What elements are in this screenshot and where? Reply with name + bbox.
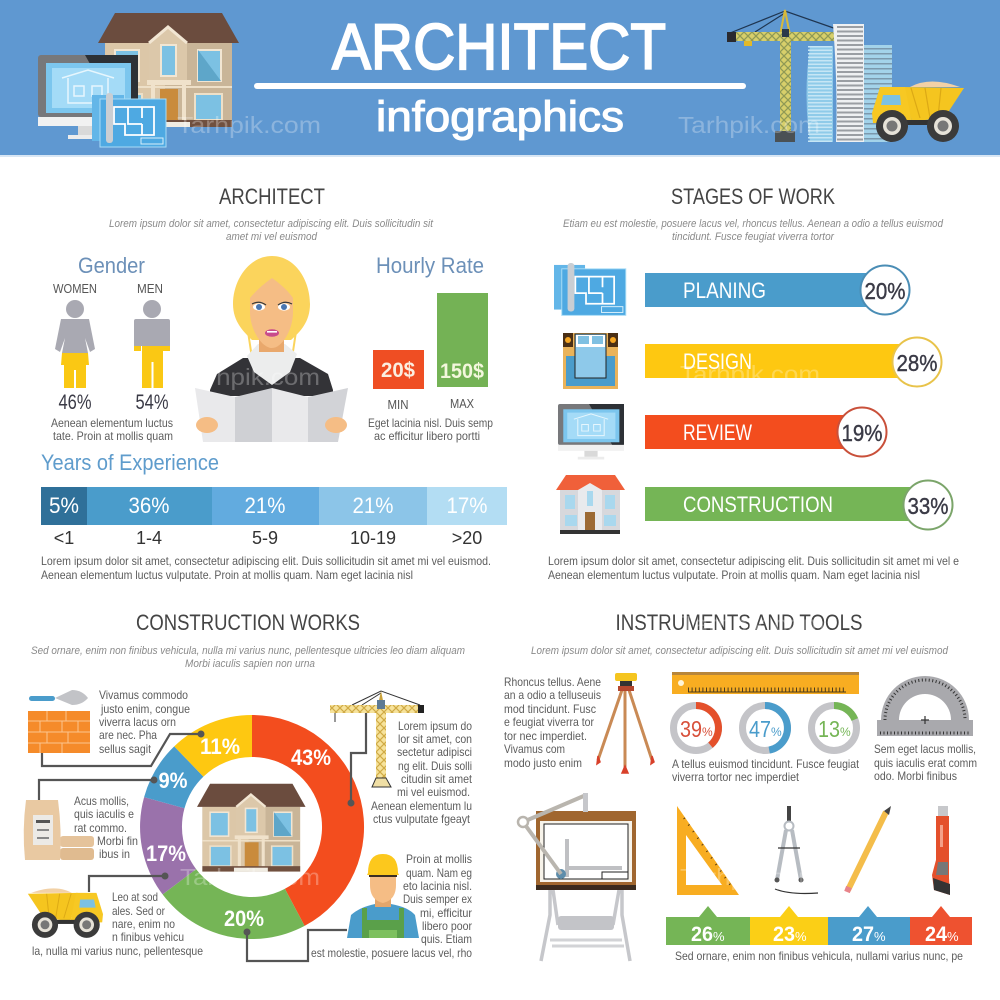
- intro text: instruments and tools: Lorem ipsum dolor sit amet, consectetur adipiscing elit. Duis sollicitudin sit amet mi vel euismod: [531, 645, 949, 657]
- men figure: [134, 281, 170, 388]
- experience labels: 1-4: [136, 528, 162, 548]
- icon: house: [98, 13, 239, 127]
- text: worker: est molestie, posuere lacus vel, rho: [311, 946, 472, 960]
- watermarks: Tarhpik.com: [180, 364, 320, 390]
- text: rings: viverra tortor nec imperdiet: [672, 770, 800, 784]
- men figure: MEN: [137, 281, 163, 296]
- min bar: 20$: [381, 359, 415, 382]
- text: rings: [672, 757, 860, 784]
- gender values: [58, 391, 168, 414]
- icon: monitor: [558, 404, 624, 459]
- icon: cement bags: [24, 800, 94, 860]
- ring chart: 13%: %: [840, 725, 851, 739]
- heading: instruments and tools: INSTRUMENTS AND TOOLS: [616, 610, 862, 635]
- icon: monitor with blueprint: [38, 55, 138, 139]
- text: truck: Leo at sod: [112, 890, 158, 904]
- heading: hourly rate: Hourly Rate: [376, 253, 484, 278]
- icon: utility knife: [932, 806, 950, 895]
- stacked tool bar: %: [947, 929, 959, 944]
- text: cement bags: [74, 794, 138, 861]
- icon: bedroom plan: [563, 333, 618, 389]
- connector: truck: [89, 872, 168, 892]
- gender text: [51, 416, 173, 443]
- experience labels: 5-9: [252, 528, 278, 548]
- donut chart: 11%: [200, 734, 240, 759]
- intro text: construction works: Sed ornare, enim non finibus vehicula, nulla mi varius nunc, pellentesque ultricies leo diam aliquam: [31, 645, 465, 657]
- intro text: stages of work: Etiam eu est molestie, posuere lacus vel, rhoncus tellus. Aenean a odio a tellus euismod: [563, 218, 944, 230]
- panel: gender: [51, 253, 173, 443]
- text: truck: ales. Sed or: [112, 904, 165, 918]
- icon: set square: [677, 806, 739, 895]
- text: worker: Duis semper ex: [403, 892, 472, 906]
- stacked tool bar: 23: [773, 923, 795, 946]
- text: level: modo justo enim: [504, 756, 582, 770]
- donut chart: 9%: [158, 768, 188, 793]
- max bar: MAX: [450, 396, 474, 411]
- stacked experience bar: [41, 487, 507, 525]
- text: protractor: [874, 742, 977, 783]
- text: worker: quis. Etiam: [421, 932, 472, 946]
- text: crane: Aenean elementum lu: [371, 799, 472, 813]
- stacked tool bar: %: [874, 929, 886, 944]
- watermarks: Tarhpik.com: [680, 864, 820, 890]
- stacked experience bar: 21%: [244, 493, 286, 518]
- watermarks: Tarhpik.com: [678, 112, 820, 138]
- experience text: [41, 554, 491, 582]
- watermarks: Tarhpik.com: [177, 112, 321, 138]
- watermarks: Tarhpik.com: [180, 864, 320, 890]
- icon: skyscrapers: [806, 24, 892, 142]
- icon: construction worker: [347, 854, 419, 938]
- icon: house with red roof: [556, 475, 625, 534]
- text: bricks: are nec. Pha: [99, 728, 157, 742]
- text: level: tor nec imperdiet.: [504, 729, 587, 743]
- panel: construction works: [24, 688, 473, 961]
- text: tools: Sed ornare, enim non finibus vehicula, nullami varius nunc, pe: [675, 949, 963, 963]
- text: crane: [371, 719, 473, 826]
- watermarks: [177, 112, 825, 890]
- donut chart: 17%: [146, 841, 186, 866]
- text: crane: citudin sit amet: [401, 772, 473, 786]
- icon: trowel and bricks: [28, 690, 90, 753]
- text: cement bags: Morbi fin: [97, 834, 138, 848]
- design bar: [645, 338, 942, 386]
- experience labels: 10-19: [350, 528, 396, 548]
- review bar: [645, 408, 886, 456]
- text: worker: libero poor: [422, 919, 472, 933]
- intro text: architect: [109, 218, 434, 243]
- text: level: Rhoncus tellus. Aene: [504, 675, 601, 689]
- stacked experience bar: 17%: [446, 493, 488, 518]
- panel: hourly rate: [368, 253, 493, 443]
- heading: architect: ARCHITECT: [219, 184, 325, 209]
- icon: pencil: [847, 806, 891, 892]
- panel: instruments and tools: [504, 672, 977, 963]
- experience labels: >20: [452, 528, 482, 548]
- stacked tool bar: %: [795, 929, 807, 944]
- text: rings: A tellus euismod tincidunt. Fusce feugiat: [672, 757, 860, 771]
- text: bricks: justo enim, congue: [100, 702, 190, 716]
- text: cement bags: quis iaculis e: [74, 807, 134, 821]
- text: bricks: sellus sagit: [99, 742, 152, 756]
- illustration: female architect with plan: [195, 256, 348, 442]
- gender values: 46%: [58, 391, 92, 414]
- text: cement bags: ibus in: [99, 847, 130, 861]
- text: bricks: [99, 688, 190, 756]
- icon: protractor: [877, 676, 973, 736]
- hourly rate text: Eget lacinia nisl. Duis semp: [368, 416, 493, 430]
- experience labels: [54, 528, 482, 548]
- ring chart: 13%: 13: [818, 716, 840, 742]
- icon: drafting table: [518, 793, 636, 961]
- stacked tool bar: [666, 906, 972, 946]
- experience text: Aenean elementum luctus vulputate. Proin at mollis quam. Nam eget lacinia nisl: [41, 568, 413, 582]
- title: ARCHITECT: [332, 10, 666, 83]
- construction bar: [645, 480, 952, 530]
- text: level: an a odio a telluseuis: [504, 688, 601, 702]
- stacked experience bar: 36%: [128, 493, 170, 518]
- intro text: stages of work: [563, 218, 944, 243]
- max bar: [437, 293, 488, 411]
- intro text: construction works: Morbi iaculis sapien non urna: [185, 658, 315, 670]
- gender text: tate. Proin at mollis quam: [53, 429, 173, 443]
- text: truck: n finibus vehicu: [112, 930, 184, 944]
- review bar: REVIEW: [683, 420, 752, 445]
- intro text: architect: Lorem ipsum dolor sit amet, consectetur adipiscing elit. Duis sollicitudin sit: [109, 218, 434, 230]
- construction bar: 33%: [908, 493, 948, 519]
- donut chart: 43%: [291, 745, 331, 770]
- text: crane: ng elit. Duis solli: [398, 759, 472, 773]
- text: truck: la, nulla mi varius nunc, pellentesque: [32, 944, 203, 958]
- icon: yellow crane: [330, 691, 424, 787]
- design bar: DESIGN: [683, 349, 752, 374]
- stacked tool bar: %: [713, 929, 725, 944]
- panel: years of experience: [41, 450, 507, 582]
- text: bricks: viverra lacus orn: [99, 715, 176, 729]
- text: worker: [311, 852, 472, 960]
- experience text: Lorem ipsum dolor sit amet, consectetur adipiscing elit. Duis sollicitudin sit amet mi vel euismod.: [41, 554, 491, 568]
- icon: house in donut centre: [197, 784, 306, 872]
- text: crane: sectetur adipisci: [397, 745, 472, 759]
- planing bar: [645, 266, 910, 314]
- ring chart: 39%: [674, 706, 718, 750]
- text: cement bags: Acus mollis,: [74, 794, 129, 808]
- stacked tool bar: 26: [691, 923, 713, 946]
- ring chart: 13%: [812, 706, 856, 750]
- ring chart: 47%: 47: [749, 716, 771, 742]
- construction bar: CONSTRUCTION: [683, 492, 833, 517]
- text: level: Vivamus com: [504, 742, 565, 756]
- icon: blueprint: [554, 263, 626, 315]
- hourly rate text: [368, 416, 493, 443]
- watermarks: Tarhpik.com: [680, 361, 820, 387]
- connector: cement bags: [39, 776, 158, 800]
- text: worker: quam. Nam eg: [406, 866, 472, 880]
- ring chart: 47%: %: [771, 725, 782, 739]
- panel: stages of work: [548, 263, 959, 582]
- text: level: e feugiat viverra tor: [504, 715, 594, 729]
- stacked tool bar: 27: [852, 923, 874, 946]
- intro text: stages of work: tincidunt. Fusce feugiat viverra tortor: [672, 231, 835, 243]
- watermarks: Tarhpik.com: [680, 611, 825, 637]
- text: bricks: Vivamus commodo: [99, 688, 188, 702]
- icon: surveyor level on tripod: [597, 673, 654, 773]
- heading: construction works: CONSTRUCTION WORKS: [136, 610, 360, 635]
- hourly rate text: ac efficitur libero portti: [374, 429, 480, 443]
- text: worker: mi, efficitur: [420, 906, 472, 920]
- text: protractor: Sem eget lacus mollis,: [874, 742, 976, 756]
- text: worker: eto lacinia nisl.: [403, 879, 472, 893]
- connector: crane: [348, 713, 366, 806]
- design bar: 28%: [896, 350, 938, 376]
- women figure: WOMEN: [53, 281, 97, 296]
- icon: tower crane: [727, 10, 849, 142]
- donut chart: [140, 715, 364, 939]
- min bar: [373, 350, 424, 412]
- gender text: Aenean elementum luctus: [51, 416, 173, 430]
- stages text: [548, 554, 959, 582]
- text: truck: [32, 890, 203, 958]
- experience labels: <1: [54, 528, 74, 548]
- text: crane: mi vel euismod.: [397, 785, 470, 799]
- heading: gender: Gender: [78, 253, 145, 278]
- stacked experience bar: 5%: [49, 493, 79, 518]
- ring chart: 47%: [742, 706, 788, 750]
- intro text: construction works: [31, 645, 465, 670]
- text: level: [504, 675, 601, 770]
- donut chart: 20%: [224, 906, 264, 931]
- stacked tool bar: 24: [925, 923, 947, 946]
- connector: bricks: [42, 730, 204, 766]
- text: level: mod tincidunt. Fusc: [504, 702, 596, 716]
- women figure: [53, 281, 97, 388]
- title divider: [254, 83, 746, 89]
- stacked experience bar: 21%: [352, 493, 394, 518]
- text: worker: Proin at mollis: [406, 852, 472, 866]
- max bar: 150$: [440, 360, 484, 383]
- heading: stages of work: STAGES OF WORK: [671, 184, 835, 209]
- stages text: Aenean elementum luctus vulputate. Proin at mollis quam. Nam eget lacinia nisl: [548, 568, 920, 582]
- text: protractor: odo. Morbi finibus: [874, 769, 957, 783]
- text: crane: ctus vulputate fgeayt: [373, 812, 471, 826]
- min bar: MIN: [388, 397, 408, 412]
- planing bar: 20%: [864, 278, 906, 304]
- connector: worker: [244, 928, 347, 961]
- icon: compass: [774, 806, 818, 894]
- icon: dump truck: [28, 888, 103, 938]
- icon: blueprint: [92, 93, 166, 147]
- gender values: 54%: [136, 391, 168, 414]
- text: protractor: quis iaculis erat comm: [874, 756, 977, 770]
- ring chart: 39%: 39: [680, 716, 702, 742]
- planing bar: PLANING: [683, 278, 766, 303]
- subtitle: infographics: [376, 93, 624, 141]
- intro text: architect: amet mi vel euismod: [226, 231, 318, 243]
- text: crane: Lorem ipsum do: [398, 719, 472, 733]
- text: cement bags: rat commo.: [74, 821, 127, 835]
- header banner: [0, 0, 1000, 157]
- icon: ruler: [672, 672, 859, 694]
- text: crane: lor sit amet, con: [398, 732, 472, 746]
- text: truck: nare, enim no: [112, 917, 175, 931]
- icon: dump truck: [872, 82, 964, 142]
- ring chart: 39%: %: [702, 725, 713, 739]
- review bar: 19%: [842, 420, 882, 446]
- heading: years of experience: Years of Experience: [41, 450, 219, 475]
